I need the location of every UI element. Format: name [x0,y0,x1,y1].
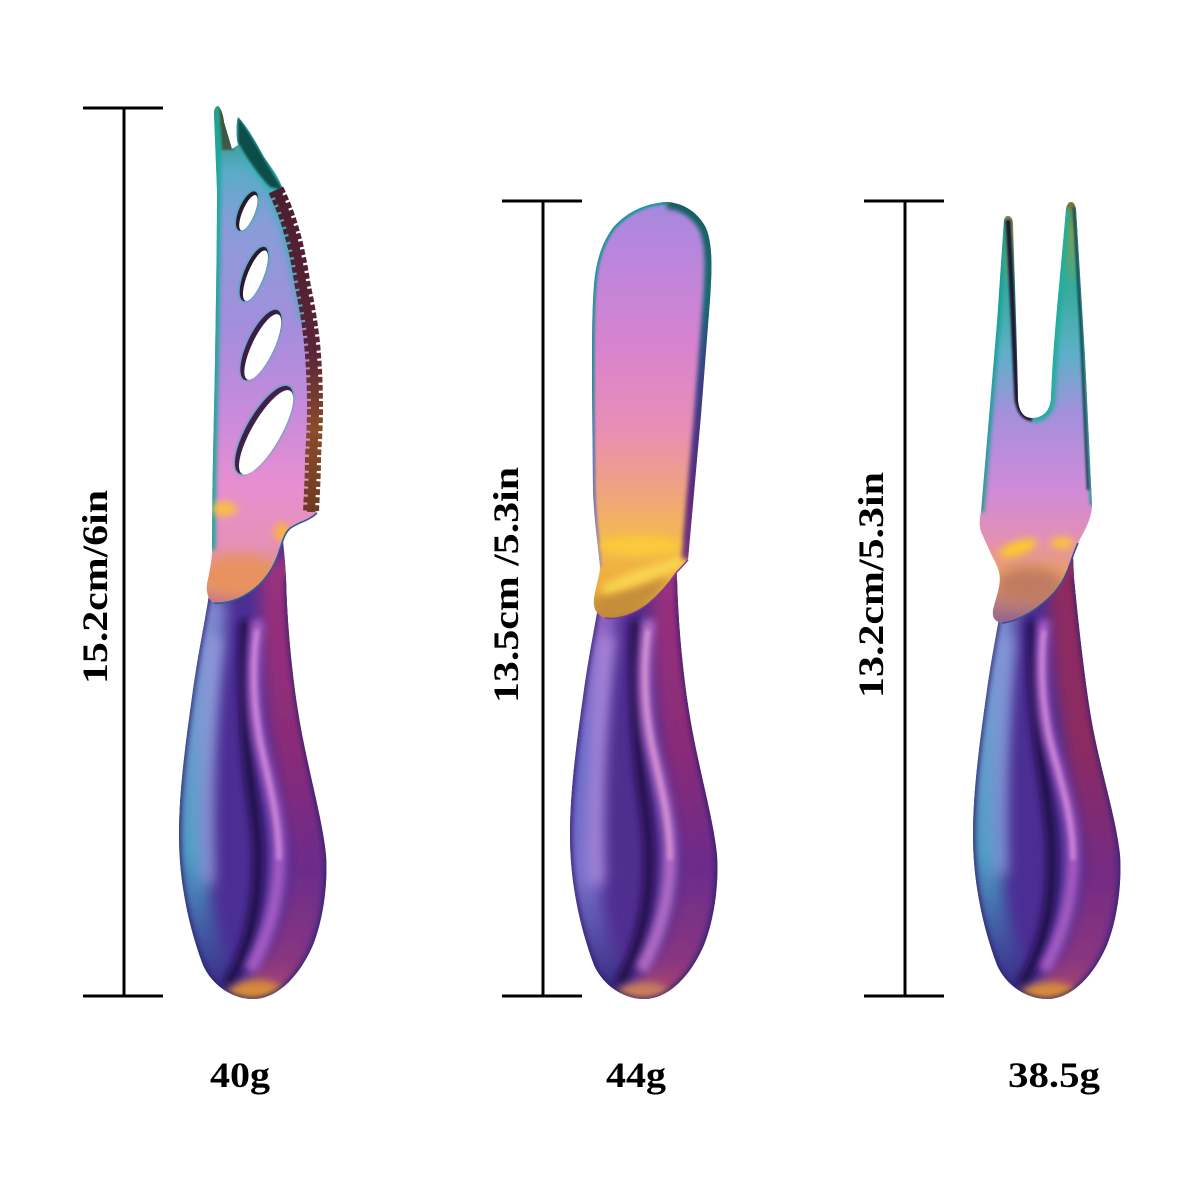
knife hole 3 [232,304,290,386]
spreader handle [570,573,718,999]
spreader: rainbow butter knife [570,202,718,999]
knife hole 4 [223,377,305,483]
spreader neck line [605,560,688,618]
dimension label: fork length: 13.2cm/5.3in [851,472,891,698]
knife hole 1 [230,187,264,235]
knife hole 2 [233,242,275,306]
weight label: spreader: 44g [606,1055,666,1095]
dimension line: spreader height [502,201,582,996]
fork head [975,198,1097,628]
spreader blade [592,202,712,618]
knife neck line [214,513,317,603]
dimension label: knife length: 15.2cm/6in [75,490,115,684]
knife blade [206,106,317,603]
dimension line: knife height [83,108,163,996]
weight label: knife: 40g [210,1055,270,1095]
knife: rainbow cheese knife [179,106,326,999]
knife serrated edge [276,190,315,512]
fork handle [973,557,1120,999]
fork neck line [1002,543,1078,623]
dimension label: spreader length: 13.5cm /5.3in [486,467,526,703]
fork: rainbow cheese fork [973,202,1120,999]
knife handle [179,542,326,999]
dimension line: fork height [864,201,944,996]
weight label: fork: 38.5g [1008,1055,1100,1095]
